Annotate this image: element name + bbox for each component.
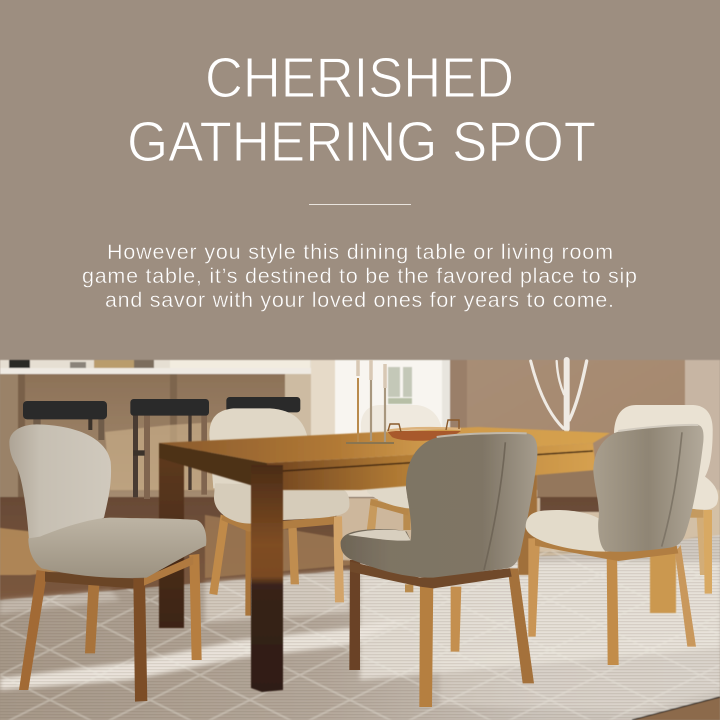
legs — [528, 538, 696, 665]
chair legs and rails — [209, 514, 344, 616]
legs — [19, 554, 202, 702]
far chair behind table — [361, 405, 442, 592]
back and wrap around arm — [341, 433, 537, 578]
description text block: and savor with your loved ones for years to come. — [105, 288, 614, 312]
dining room scene — [0, 360, 720, 720]
title: GATHERING SPOT — [127, 110, 596, 174]
window — [335, 360, 450, 450]
woven basket — [387, 420, 461, 441]
description text block — [82, 240, 637, 312]
seat top highlight — [348, 530, 411, 541]
title — [127, 46, 596, 174]
sunlit patches on rug — [0, 562, 720, 712]
floor — [0, 490, 720, 607]
front leg — [251, 465, 283, 692]
description text block: However you style this dining table or living room — [107, 240, 613, 264]
table apron — [159, 443, 596, 490]
back and seat — [614, 405, 718, 510]
chair back — [209, 408, 308, 488]
stool one — [23, 401, 107, 440]
stool two — [130, 399, 209, 499]
table top — [159, 427, 610, 463]
leg — [690, 509, 712, 594]
back wall and kitchen — [0, 360, 720, 515]
stool three — [226, 397, 300, 412]
back legs — [159, 450, 676, 628]
seat — [526, 510, 605, 552]
back — [593, 425, 704, 552]
far chair left side of table — [209, 408, 349, 616]
back — [9, 424, 111, 545]
rug — [0, 535, 720, 720]
back and seat — [361, 405, 442, 508]
bar stools — [23, 397, 300, 499]
seat — [28, 518, 206, 578]
legs — [349, 560, 534, 707]
front right chair — [526, 425, 704, 665]
front centre chair — [341, 433, 537, 707]
far right chair — [614, 405, 718, 594]
dining table — [159, 427, 676, 692]
tree branch decor — [531, 360, 587, 429]
chair seat — [214, 483, 349, 524]
description text block: game table, it’s destined to be the favored place to sip — [82, 264, 637, 288]
candle holders — [346, 360, 394, 443]
front left chair — [9, 424, 206, 702]
header panel background — [0, 0, 720, 360]
taupe wall — [450, 360, 685, 490]
legs — [367, 499, 413, 592]
title: CHERISHED — [205, 46, 514, 110]
